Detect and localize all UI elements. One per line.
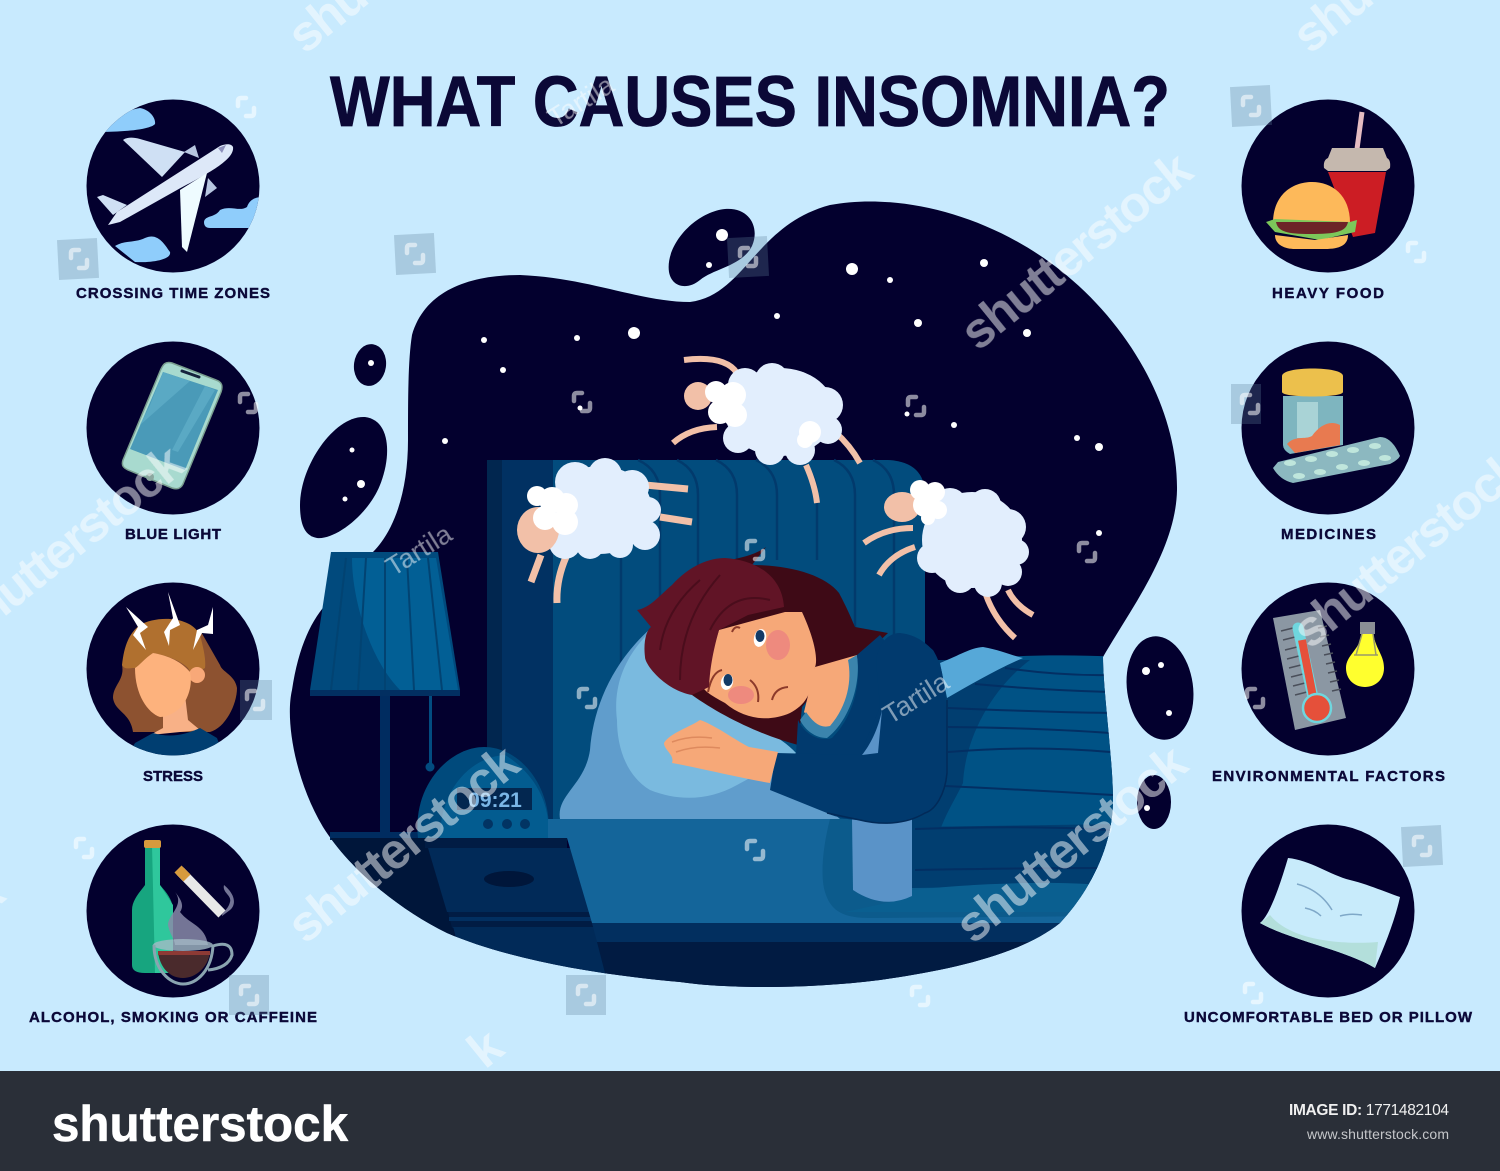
label: STRESS: [143, 768, 203, 785]
label: HEAVY FOOD: [1272, 285, 1384, 302]
alarm clock: [417, 747, 549, 838]
sheep: right: [864, 480, 1033, 638]
watermarks: shutterstock: [945, 734, 1198, 954]
footer bar: shutterstock: [52, 1096, 348, 1152]
stars: [342, 229, 1172, 811]
title: WHAT CAUSES INSOMNIA?: [330, 63, 1170, 142]
alarm clock: 09:21: [468, 789, 522, 812]
icon: stress: [86, 582, 260, 760]
watermarks: shutterstock: [277, 734, 530, 954]
headboard: [487, 460, 925, 820]
sheep: left: [517, 458, 692, 603]
watermarks: shutterstock: [950, 141, 1203, 361]
watermarks: k: [457, 1017, 514, 1079]
bed: [548, 647, 1120, 1000]
icon: phone: [86, 342, 260, 514]
watermarks: Tartila: [542, 69, 620, 133]
watermarks: Tartila: [380, 518, 458, 582]
icon: medicines: [1242, 342, 1414, 514]
footer bar: www.shutterstock.com: [1306, 1126, 1449, 1142]
icon: burger and drink: [1242, 100, 1414, 272]
night sky blob: [290, 201, 1200, 987]
watermarks: Tartila: [877, 666, 955, 730]
woman in bed: [637, 547, 947, 823]
nightstand: [330, 838, 608, 974]
icon: alcohol, cigarette, coffee: [86, 824, 260, 998]
icon: thermometer and bulb: [1242, 582, 1414, 756]
footer bar: IMAGE ID: 1771482104: [1289, 1102, 1449, 1119]
pillow: [560, 628, 840, 819]
icon: plane: [86, 100, 262, 272]
lamp: [310, 552, 460, 840]
label: MEDICINES: [1281, 526, 1376, 543]
label: ENVIRONMENTAL FACTORS: [1212, 768, 1445, 785]
sheep: top: [673, 359, 860, 503]
label: ALCOHOL, SMOKING OR CAFFEINE: [29, 1009, 317, 1026]
label: CROSSING TIME ZONES: [76, 285, 270, 302]
label: UNCOMFORTABLE BED OR PILLOW: [1184, 1009, 1473, 1026]
footer bar: [0, 1071, 1500, 1171]
icon: pillow: [1242, 824, 1414, 998]
watermark logo marks: [57, 85, 1443, 1015]
label: BLUE LIGHT: [125, 526, 221, 543]
